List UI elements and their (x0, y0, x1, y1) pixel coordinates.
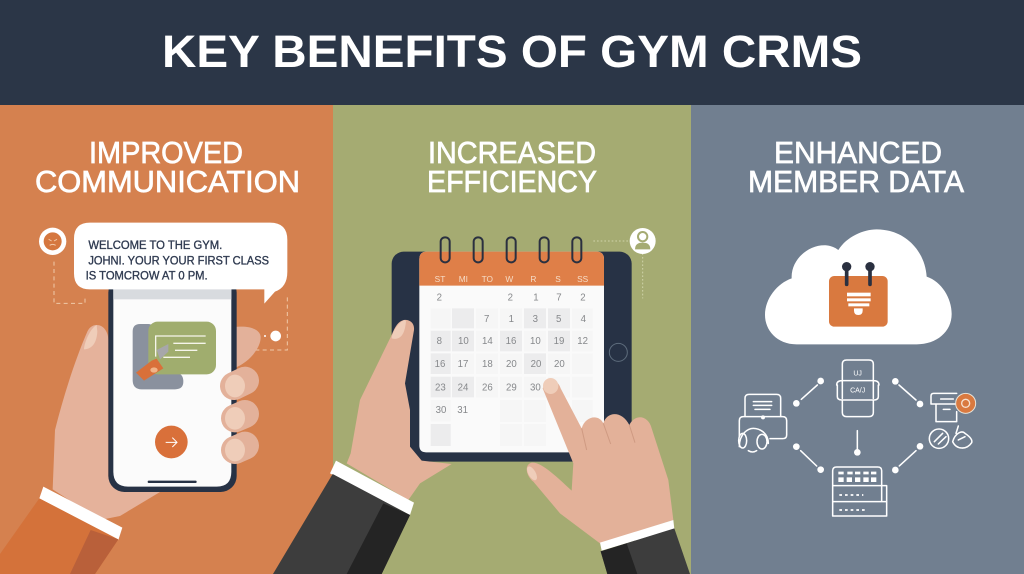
date numbers: 5 (556, 314, 561, 325)
bubble message: JOHNI. YOUR YOUR FIRST CLASS (88, 255, 269, 268)
weekday labels: R (530, 274, 536, 284)
left cuff (330, 461, 414, 515)
date numbers: 24 (458, 382, 469, 393)
illustration: cloud and data network (739, 229, 976, 516)
index finger back (233, 327, 261, 368)
heading: improved communication: IMPROVED (89, 135, 243, 170)
date numbers: 7 (556, 292, 562, 303)
heading: improved communication (35, 135, 300, 199)
date numbers: 2 (508, 292, 513, 303)
illustration: hands using calendar tablet (273, 228, 690, 574)
network connectors (793, 378, 923, 473)
date numbers: 23 (435, 382, 446, 393)
cuff (39, 487, 122, 540)
weekday labels: W (505, 274, 513, 284)
sleeve (0, 498, 118, 574)
tablet (392, 237, 632, 462)
date numbers: 18 (482, 359, 493, 370)
date numbers: 10 (530, 336, 541, 347)
date numbers: 16 (435, 359, 445, 370)
date numbers: 12 (577, 336, 588, 347)
date numbers: 1 (509, 314, 514, 325)
weekday labels (435, 274, 589, 284)
date numbers: 20 (506, 359, 517, 370)
date numbers: 3 (533, 314, 538, 325)
bubble message: WELCOME TO THE GYM. (88, 239, 222, 252)
panel: increased efficiency (273, 105, 691, 574)
heading: increased efficiency (427, 135, 597, 199)
cloud (765, 229, 952, 344)
icon: member card device: UJ (853, 371, 862, 378)
heading: enhanced member data: ENHANCED (774, 135, 942, 170)
illustration: hand holding phone (0, 223, 287, 574)
date numbers: 1 (533, 292, 539, 303)
date numbers: 30 (530, 382, 541, 393)
icon: user badge (593, 228, 656, 298)
title: KEY BENEFITS OF GYM CRMS (162, 26, 862, 77)
header banner (0, 0, 1024, 105)
panel: enhanced member data (691, 105, 1024, 574)
heading: increased efficiency: INCREASED (428, 135, 596, 170)
left hand (347, 320, 452, 500)
hand palm and thumb (53, 325, 163, 520)
icon: calendar in cloud (829, 262, 888, 327)
date numbers: 30 (436, 405, 446, 416)
date numbers: 20 (531, 359, 541, 370)
weekday labels: TO (482, 274, 494, 284)
weekday labels: MI (459, 274, 468, 284)
weekday labels: SS (577, 274, 589, 284)
icon: white dot (264, 331, 281, 341)
date numbers: 7 (484, 314, 489, 325)
date numbers: 26 (482, 382, 493, 393)
weekday labels: ST (435, 274, 445, 284)
bubble message (86, 239, 269, 283)
left thumbnail (392, 320, 406, 339)
icon: records and badge (929, 393, 976, 448)
date numbers: 19 (554, 336, 564, 347)
right cuff (600, 520, 674, 551)
date numbers: 8 (437, 336, 442, 347)
icon: member card device: CA/J (850, 388, 865, 395)
bubble message: IS TOMCROW AT 0 PM. (86, 270, 208, 283)
date numbers (435, 292, 588, 416)
right hand (527, 381, 673, 543)
speech bubble (74, 223, 287, 304)
date numbers: 14 (482, 336, 493, 347)
heading: enhanced member data (748, 135, 964, 199)
left sleeve (273, 474, 410, 574)
date numbers: 20 (554, 359, 565, 370)
phone (108, 277, 237, 492)
weekday labels: S (555, 274, 561, 284)
icon: laptop with headset (739, 394, 787, 452)
date numbers: 16 (506, 336, 516, 347)
fingers (84, 325, 245, 461)
binder rings (441, 237, 581, 262)
right sleeve (601, 528, 690, 574)
date numbers: 10 (458, 336, 469, 347)
date numbers: 17 (458, 359, 468, 370)
calendar page (419, 237, 604, 452)
icon: member card device (837, 360, 879, 417)
screen illustration (133, 322, 216, 389)
finger creases and nails (525, 378, 635, 482)
date numbers: 31 (457, 405, 468, 416)
heading: increased efficiency: EFFICIENCY (427, 164, 597, 199)
date numbers: 2 (437, 292, 442, 303)
heading: improved communication: COMMUNICATION (35, 164, 300, 199)
date numbers: 29 (506, 382, 517, 393)
button: arrow (155, 426, 188, 458)
date numbers: 4 (581, 314, 587, 325)
heading: enhanced member data: MEMBER DATA (748, 164, 964, 199)
date numbers: 2 (580, 292, 586, 303)
dashed connectors (54, 262, 287, 350)
icon: server database (833, 467, 887, 516)
date cells (431, 308, 593, 446)
icon: face badge (39, 228, 66, 255)
panel: improved communication (0, 105, 333, 574)
